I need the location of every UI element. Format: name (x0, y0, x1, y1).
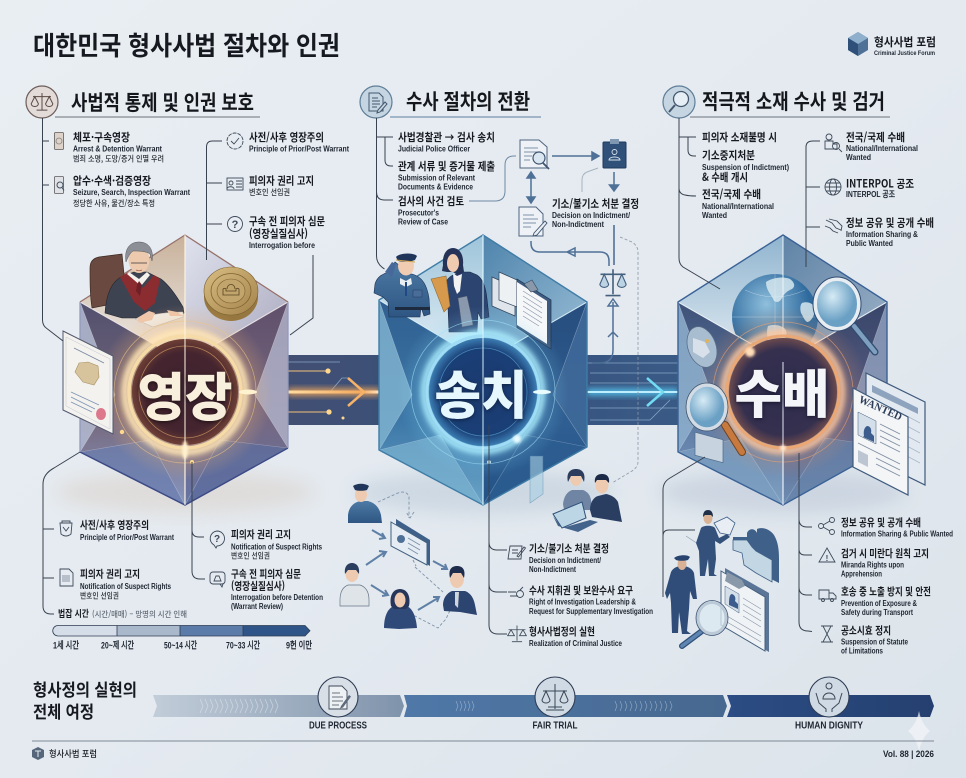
timeline bar: 20~제 시간 (101, 640, 134, 652)
illustration: prosecutor with folder (431, 248, 489, 332)
text: interrogation before detention (231, 566, 323, 611)
timeline bar: 9헌 이만 (286, 640, 312, 652)
text: rights notice: Notification of Suspect Rights (80, 581, 171, 591)
glow and central disc (697, 306, 869, 505)
arrow: document to clipboard (552, 152, 599, 160)
icon: warning triangle: ! (826, 554, 828, 563)
illustration: fugitive search scene (663, 457, 779, 652)
text: statute suspension (841, 623, 908, 656)
panel: warrants upper left (42, 118, 190, 341)
text: prior warrant principle: 사전/사후 영장주의 (249, 129, 324, 145)
text: arrest warrant: 체포·구속영장 (73, 129, 130, 145)
logo: Criminal Justice Forum: Criminal Justice Forum (874, 50, 935, 57)
text: prior warrant principle (249, 129, 349, 154)
timeline bar (53, 626, 312, 652)
arrow: clipboard to decision (610, 172, 618, 191)
text: prior warrant (80, 518, 174, 542)
cube 2: referral (353, 235, 613, 514)
text: prior warrant: 사전/사후 영장주의 (80, 518, 149, 532)
icon: due process (318, 677, 358, 717)
cube 2 floor shadow (353, 470, 613, 514)
illustration: wanted posters (853, 373, 925, 495)
text: miranda: 검거 시 미란다 원칙 고지 (841, 546, 929, 561)
text: rights notice: Notification of Suspect Rights (231, 542, 322, 552)
footer (32, 741, 934, 760)
panel: overall journey (33, 676, 934, 732)
text: journey title (33, 676, 137, 723)
icon: hourglass (821, 626, 833, 642)
icon: investigator standing (696, 510, 735, 576)
illustration: wanted posters: WANTED (857, 394, 904, 423)
icon: badge (60, 521, 72, 536)
text: prosecutor review (398, 193, 464, 226)
text: info sharing (841, 515, 953, 538)
glow and central disc (397, 235, 569, 505)
text: statutory time: 법잡 시간 (58, 606, 89, 620)
text: national wanted (702, 186, 774, 220)
text: miranda: Apprehension (841, 568, 882, 578)
illustration: globe (732, 274, 818, 360)
text: national wanted: 전국/국제 수배 (702, 186, 761, 202)
text: rights notice: 변호인 선임권 (249, 187, 290, 198)
footer logo (32, 747, 44, 760)
panel: wanted channels (806, 129, 934, 267)
cube 3 faces (678, 235, 887, 505)
text: info sharing: Information Sharing & (846, 229, 918, 239)
text: search warrant: Seizure, Search, Inspection Warrant (73, 187, 190, 197)
icon: document (60, 569, 73, 586)
arrow: orange chevron (348, 378, 364, 406)
text: documents and evidence (398, 158, 495, 192)
arrow: band to scales (592, 299, 618, 363)
text: national wanted: National/International (702, 201, 774, 211)
text: arrest warrant: Arrest & Detention Warrant (73, 144, 162, 154)
text: suspension of indictment: & 수배 개시 (702, 169, 748, 185)
cube 2 edges (379, 235, 587, 505)
text: judicial police: 사법경찰관 → 검사 송치 (398, 129, 495, 145)
text: statute suspension: Suspension of Statute (841, 636, 908, 646)
cube 1 faces (80, 235, 288, 505)
illustration: map badge (682, 322, 722, 372)
text: investigation leadership: Request for Supplementary Investigation (529, 606, 653, 616)
cube 1: warrant (55, 235, 315, 514)
cube 1 floor shadow (55, 470, 315, 514)
icon: prosecutor bust (443, 566, 477, 615)
logo: Criminal Justice Forum: 형사사법 포럼 (874, 34, 936, 50)
icon: magnifier (663, 86, 695, 118)
text: rights notice: 피의자 권리 고지 (249, 172, 314, 188)
text: miranda: Miranda Rights upon (841, 560, 904, 570)
arrow: return to document (531, 241, 609, 266)
text: indictment decision: Decision on Indictment/ (552, 210, 630, 220)
text: judicial police (398, 129, 495, 154)
text: indictment decision: Non-Indictment (552, 219, 604, 229)
label: fair trial: FAIR TRIAL (532, 720, 578, 732)
timeline bar: 50~14 시간 (164, 640, 197, 652)
text: prior warrant principle: Principle of Prior/Post Warrant (249, 144, 349, 154)
arrow: double vertical (527, 172, 535, 203)
icon: question bubble (210, 531, 224, 548)
illustration: saluting police officer (374, 253, 430, 317)
arrow: police to folder (372, 530, 385, 539)
icon: clipboard (603, 139, 626, 168)
text: rights notice: 피의자 권리 고지 (80, 566, 140, 582)
text: info sharing (846, 214, 934, 248)
arrow: cyan chevron (647, 378, 663, 406)
text: interrogation before detention: (영장실질심사) (231, 578, 285, 594)
timeline bar: 1세 시간 (53, 640, 79, 652)
cube 3 edges (678, 235, 887, 505)
icon: warrant document (54, 132, 64, 150)
text: rights notice (249, 172, 314, 198)
text: criminal justice (529, 624, 622, 648)
text: transport safety: Safety during Transport (841, 607, 913, 617)
illustration: investigation team network (340, 484, 477, 629)
icon: command signal (508, 587, 524, 598)
text: search warrant: 정당한 사유, 물건/장소 특정 (73, 198, 155, 209)
text: statute suspension: 공소시효 정지 (841, 623, 891, 638)
cube 3 floor shadow (658, 470, 908, 514)
text: prosecutor review: 검사의 사건 검토 (398, 193, 464, 209)
text: rights notice: 피의자 권리 고지 (231, 527, 291, 542)
text: statutory time: (시간/매매) – 망명의 시간 인해 (92, 609, 187, 620)
heading: fugitive investigation: 적극적 소재 수사 및 검거 (702, 86, 885, 116)
panel: investigation heading (360, 86, 541, 118)
heading: investigation: 수사 절차의 전환 (406, 86, 530, 116)
panel: prosecution outcomes (489, 425, 653, 648)
text: suspension of indictment (702, 147, 789, 185)
icon: signed form (508, 546, 526, 559)
icon: human dignity (809, 677, 849, 717)
big word: referral: 송치 (434, 354, 528, 429)
icon: case folder (391, 519, 430, 566)
panel: warrant principles upper right (206, 129, 349, 335)
icon: police standing (665, 555, 697, 634)
icon: warning triangle (819, 548, 835, 563)
text: transport safety: 호송 중 노출 방지 및 안전 (841, 584, 931, 599)
text: whereabouts unknown: 피의자 소재불명 시 (702, 129, 777, 145)
icon: scales (600, 269, 626, 296)
text: transport safety: Prevention of Exposure & (841, 598, 917, 608)
icon: share (818, 518, 834, 534)
text: suspension of indictment: Suspension of Indictment) (702, 162, 789, 172)
text: investigation leadership: Right of Investigation Leadership & (529, 596, 636, 606)
footer name: 형사사법 포럼 (49, 747, 97, 760)
text: interpol: INTERPOL 공조 (846, 189, 895, 199)
text: national wanted: 전국/국제 수배 (846, 129, 905, 145)
icon: fair trial (535, 677, 575, 717)
cube 3: wanted (658, 235, 925, 514)
text: prosecutor review: Prosecutor's (398, 208, 439, 218)
text: suspension of indictment: 기소중지처분 (702, 147, 755, 163)
icon: hearing bubble (210, 572, 225, 587)
text: indictment decision: Non-Indictment (529, 564, 576, 574)
illustration: team with laptop (530, 456, 622, 532)
text: miranda (841, 546, 929, 578)
text: documents and evidence: Documents & Evidence (398, 182, 473, 192)
illustration: lower magnifier (686, 383, 742, 463)
icon: question mark (228, 216, 242, 232)
icon: globe (825, 179, 841, 195)
text: transport safety (841, 584, 931, 617)
text: info sharing: Public Wanted (846, 238, 893, 248)
text: journey title: 형사정의 실현의 (33, 676, 137, 701)
text: indictment decision: 기소/불기소 처분 결정 (552, 196, 639, 212)
icon: scales (508, 626, 526, 642)
text: statute suspension: of Limitations (841, 646, 883, 656)
text: interrogation before detention: Interrogation before Detention (231, 592, 323, 602)
icon: document with pen (360, 86, 392, 118)
title: 대한민국 형사사법 절차와 인권 (33, 26, 340, 63)
panel: suspect rights lower center-left (192, 462, 323, 611)
text: info sharing: 정보 공유 및 공개 수배 (841, 515, 921, 530)
icon: investigator bust (340, 563, 369, 606)
text: search warrant: 압수·수색·검증영장 (73, 172, 151, 188)
arrow: journey band (153, 695, 934, 717)
heading: judicial control: 사법적 통제 및 인권 보호 (71, 87, 254, 117)
panel: warrant safeguards lower left (43, 452, 312, 652)
text: journey title: 전체 여정 (33, 698, 94, 723)
text: rights notice: 변호인 선임권 (80, 590, 119, 602)
icon: map puzzle (733, 528, 779, 583)
text: search warrant (73, 172, 190, 209)
label: due process: DUE PROCESS (309, 720, 367, 732)
illustration: judge (90, 242, 184, 327)
icon: people search (825, 134, 842, 152)
text: statutory time (58, 606, 187, 620)
text: pre-detention interrogation: (영장실질심사) (249, 226, 308, 242)
text: criminal justice: Realization of Criminal Justice (529, 638, 622, 648)
text: prosecutor review: Review of Case (398, 216, 448, 226)
text: criminal justice: 형사사법정의 실현 (529, 624, 595, 639)
text: indictment decision (529, 541, 609, 574)
icon: handshake (825, 219, 842, 233)
text: arrest warrant (73, 129, 164, 164)
text: judicial police: Judicial Police Officer (398, 144, 471, 154)
icon: verified badge (227, 133, 243, 149)
logo: Criminal Justice Forum (848, 32, 936, 57)
text: rights notice: 변호인 선임권 (231, 550, 270, 562)
text: indictment decision: 기소/불기소 처분 결정 (529, 541, 609, 556)
text: national wanted: Wanted (846, 152, 871, 162)
text: indictment decision (552, 196, 639, 229)
icon: dossier with magnifier (682, 568, 769, 652)
text: pre-detention interrogation: 구속 전 피의자 심문 (249, 213, 325, 229)
illustration: warrant document (63, 331, 113, 434)
text: investigation leadership: 수사 지휘권 및 보완수사 요구 (529, 583, 633, 598)
icon: question mark: ? (232, 219, 239, 231)
panel: whereabouts unknown (679, 118, 789, 289)
cube 1 edges (80, 235, 288, 505)
text: rights notice (231, 527, 322, 562)
text: documents and evidence: 관계 서류 및 증거물 제출 (398, 158, 495, 174)
connecting band between cubes (285, 355, 680, 425)
illustration: gold seal coin (204, 267, 258, 321)
panel: referral procedure (376, 118, 639, 483)
illustration: large magnifier (813, 277, 875, 352)
icon: suspect id card (227, 178, 243, 190)
big word: warrant: 영장 (138, 356, 232, 431)
icon: document with pen (519, 207, 547, 236)
panel: fugitive heading (663, 86, 890, 118)
text: national wanted (846, 129, 918, 162)
illustration: case files (492, 272, 551, 349)
footer volume: Vol. 88 | 2026 (883, 749, 934, 760)
text: rights notice (80, 566, 171, 602)
glow and central disc (97, 235, 273, 505)
timeline bar: 70~33 시간 (226, 640, 260, 652)
panel: judicial control heading (26, 86, 260, 118)
cube 2 faces (379, 235, 587, 505)
icon: police bust (348, 484, 382, 523)
sparkle (908, 711, 930, 751)
text: pre-detention interrogation: Interrogation before (249, 240, 315, 250)
text: interrogation before detention: (Warrant Review) (231, 601, 283, 611)
text: national wanted: National/International (846, 143, 918, 153)
icon: transport van (819, 590, 836, 602)
text: interrogation before detention: 구속 전 피의자 심문 (231, 566, 301, 582)
text: prior warrant: Principle of Prior/Post Warrant (80, 532, 174, 542)
icon: woman bust (384, 589, 417, 629)
dashed review path (612, 237, 638, 483)
text: investigation leadership (529, 583, 653, 616)
text: info sharing: 정보 공유 및 공개 수배 (846, 214, 934, 230)
text: national wanted: Wanted (702, 210, 727, 220)
panel: apprehension safeguards (799, 453, 953, 656)
text: interpol: INTERPOL 공조 (846, 176, 914, 192)
text: documents and evidence: Submission of Relevant (398, 172, 475, 182)
text: interpol (846, 176, 914, 199)
big word: wanted: 수배 (734, 353, 830, 428)
text: pre-detention interrogation (249, 213, 325, 250)
icon: document search (520, 140, 549, 169)
text: indictment decision: Decision on Indictment/ (529, 555, 601, 565)
label: human dignity: HUMAN DIGNITY (795, 720, 863, 732)
icon: search document (54, 176, 64, 194)
icon: question bubble: ? (214, 534, 220, 545)
arrow: woman to prosecutor (418, 597, 439, 610)
text: arrest warrant: 범죄 소명, 도망/증거 인멸 우려 (73, 154, 164, 164)
arrow: investigator to folder (366, 551, 386, 565)
icon: scales (26, 86, 58, 118)
